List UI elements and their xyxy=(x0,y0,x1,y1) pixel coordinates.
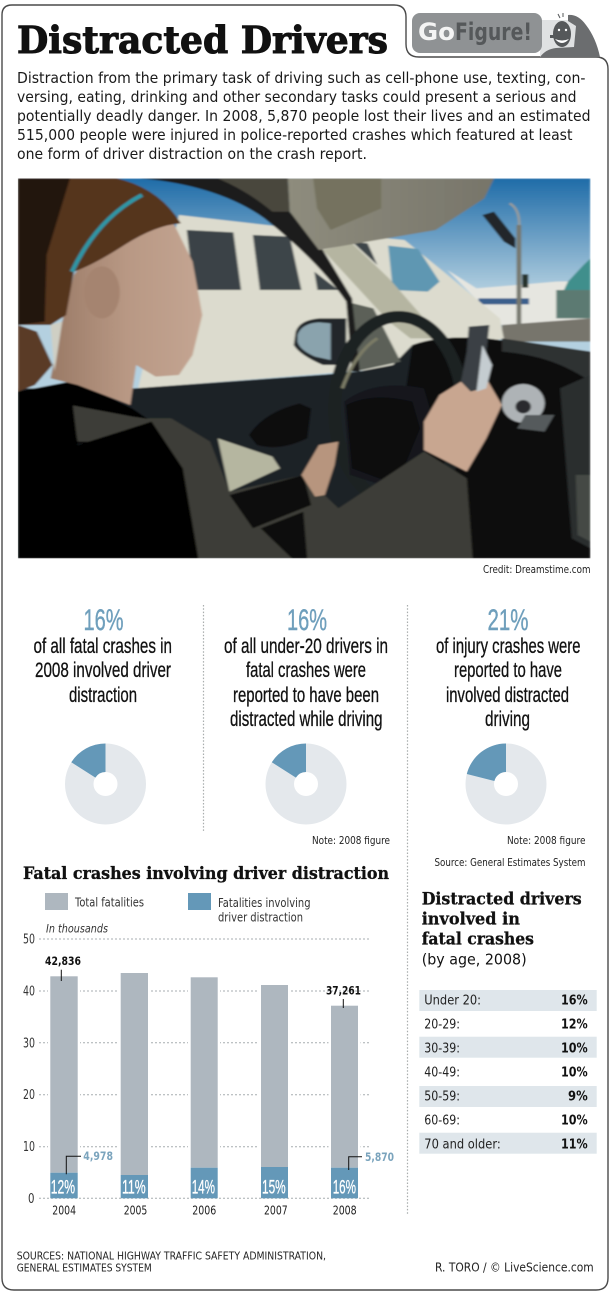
intro text xyxy=(17,69,590,163)
age table: Under 20: xyxy=(424,992,481,1008)
stat: under-20 drivers: fatal crashes were xyxy=(246,659,366,682)
legend: Total fatalities xyxy=(74,896,144,910)
age table heading xyxy=(422,889,582,968)
age table: 12% xyxy=(561,1016,588,1032)
stat: fatal crashes: 16% xyxy=(84,604,124,637)
age table: 40-49: xyxy=(424,1064,460,1080)
van xyxy=(138,215,504,388)
right hand xyxy=(422,380,503,473)
donut chart: 16% xyxy=(71,744,132,810)
bar 2008: 16% xyxy=(333,1178,356,1199)
callout: 37,261: 37,261 xyxy=(326,983,361,997)
A-pillar and visor xyxy=(323,243,442,338)
bar 2008: 2008 xyxy=(333,1204,357,1218)
legend: Fatalities involving xyxy=(218,896,310,910)
bar 2005 xyxy=(121,973,148,1218)
age table: 10% xyxy=(561,1064,588,1080)
bar halos xyxy=(48,973,360,1197)
age table: 60-69: xyxy=(424,1112,460,1128)
y axis labels: 20 xyxy=(23,1088,35,1103)
left hand xyxy=(301,442,338,497)
neck and face xyxy=(51,218,202,405)
legend: driver distraction xyxy=(218,910,303,924)
building xyxy=(447,270,591,325)
stat: injury crashes xyxy=(434,604,586,869)
callout: 37,261 xyxy=(326,983,361,1008)
hair xyxy=(18,178,181,325)
bar 2006: 14% xyxy=(192,1178,215,1199)
stat: fatal crashes: 2008 involved driver xyxy=(35,659,171,682)
photo: girl texting while driving xyxy=(18,178,591,558)
callout: 4,978: 4,978 xyxy=(83,1149,113,1163)
age table heading: Distracted drivers xyxy=(422,889,582,908)
stat: under-20 drivers: reported to have been xyxy=(233,684,379,707)
sources xyxy=(17,1251,326,1275)
bar 2004 xyxy=(50,976,78,1218)
y axis labels: 10 xyxy=(23,1140,35,1155)
note: Note: 2008 figure xyxy=(312,835,390,847)
sources: GENERAL ESTIMATES SYSTEM xyxy=(17,1263,152,1275)
bar 2007: 15% xyxy=(262,1178,286,1199)
bar 2005: 2005 xyxy=(124,1204,147,1218)
note: Note: 2008 figure xyxy=(507,835,586,847)
callout: 42,836: 42,836 xyxy=(45,954,81,968)
bar chart: fatalities by year xyxy=(23,922,394,1218)
stat: fatal crashes: of all fatal crashes in xyxy=(34,635,172,658)
unit label: In thousands xyxy=(46,922,108,936)
bar 2005: 11% xyxy=(122,1178,146,1199)
stat: fatal crashes: distraction xyxy=(69,684,137,707)
icon: GoFigure logo: Go xyxy=(418,18,455,46)
callout: 42,836 xyxy=(45,954,81,981)
age table: 10% xyxy=(561,1112,588,1128)
icon: GoFigure logo xyxy=(412,13,600,57)
stat: injury crashes: reported to have xyxy=(454,659,562,682)
age table: 20-29: xyxy=(424,1016,460,1032)
dash xyxy=(406,338,590,558)
age table: 11% xyxy=(561,1136,588,1152)
bar 2008 xyxy=(331,1006,358,1218)
age table heading: (by age, 2008) xyxy=(422,950,527,968)
steering wheel xyxy=(332,310,463,470)
callout: 4,978 xyxy=(66,1149,113,1174)
bar 2004: 12% xyxy=(51,1178,75,1199)
side mirror xyxy=(294,318,346,365)
door xyxy=(249,403,311,447)
age table: 9% xyxy=(568,1088,588,1104)
stat: fatal crashes xyxy=(34,604,172,810)
icon: GoFigure logo: Figure! xyxy=(455,18,532,46)
bar 2007 xyxy=(261,985,288,1218)
phone xyxy=(461,325,489,392)
age table: 30-39: xyxy=(424,1040,460,1056)
age table: 16% xyxy=(561,992,588,1008)
stat: injury crashes: driving xyxy=(485,708,530,731)
y axis labels: 30 xyxy=(23,1036,35,1051)
y axis labels xyxy=(23,932,35,1207)
chart heading: Fatal crashes involving driver distraction xyxy=(23,864,389,884)
callout: 5,870: 5,870 xyxy=(365,1150,394,1164)
age table xyxy=(419,990,597,1154)
sources: SOURCES: NATIONAL HIGHWAY TRAFFIC SAFETY ADMINISTRATION, xyxy=(17,1251,326,1263)
age table heading: involved in xyxy=(422,909,520,928)
window base interior xyxy=(18,337,591,558)
legend xyxy=(45,893,310,924)
y axis labels: 0 xyxy=(28,1192,34,1207)
bar 2004: 2004 xyxy=(52,1204,76,1218)
age table: 50-59: xyxy=(424,1088,460,1104)
dividers xyxy=(204,605,408,1215)
bar 2006: 2006 xyxy=(192,1204,216,1218)
intro text: one form of driver distraction on the crash report. xyxy=(17,145,367,163)
age table: 70 and older: xyxy=(424,1136,501,1152)
stat: under-20 drivers: distracted while driving xyxy=(230,708,382,731)
bar 2006 xyxy=(191,977,218,1218)
callout: 5,870 xyxy=(349,1150,394,1170)
y axis labels: 40 xyxy=(23,984,35,1000)
stat: under-20 drivers: of all under-20 drivers in xyxy=(224,635,388,658)
donut chart: 16% xyxy=(272,744,332,810)
sweater xyxy=(148,418,474,558)
stat: under-20 drivers xyxy=(224,604,390,847)
age table heading: fatal crashes xyxy=(422,929,534,948)
photo credit: Credit: Dreamstime.com xyxy=(483,564,590,576)
y axis labels: 50 xyxy=(23,932,35,948)
donut chart: 21% xyxy=(467,744,532,810)
title: Distracted Drivers xyxy=(17,18,388,62)
age table: 10% xyxy=(561,1040,588,1056)
bar 2007: 2007 xyxy=(264,1204,288,1218)
stat: injury crashes: 21% xyxy=(488,604,528,637)
stat: under-20 drivers: 16% xyxy=(287,604,327,637)
